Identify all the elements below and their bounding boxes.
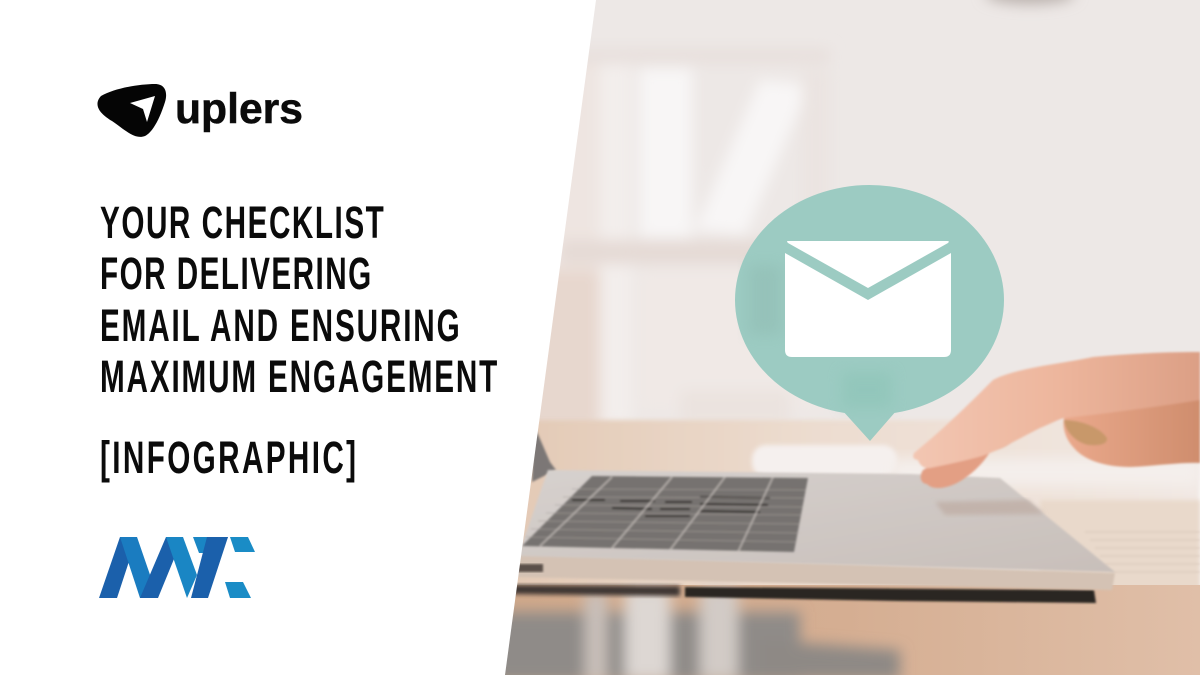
envelope body	[785, 253, 951, 357]
table foreground	[490, 585, 1200, 675]
subtitle: infographic tag: [INFOGRAPHIC]	[100, 433, 356, 484]
title: EMAIL AND ENSURING	[100, 301, 460, 352]
laptop front edge	[515, 554, 1115, 590]
icon: paper plane blob	[97, 84, 166, 137]
title: FOR DELIVERING	[100, 249, 371, 300]
desk surface	[517, 418, 1200, 585]
logo: uplers	[97, 84, 303, 137]
thumbnail	[1064, 420, 1107, 445]
background photo: laptop on desk	[490, 0, 1200, 675]
blurred wall and bookshelf	[490, 0, 1200, 430]
speech bubble with envelope	[735, 185, 1004, 441]
laptop	[512, 425, 1115, 603]
hand	[913, 352, 1200, 488]
laptop deck	[518, 470, 1115, 572]
trackpad edge	[935, 500, 1044, 515]
wordmark: uplers	[175, 85, 303, 133]
title: MAXIMUM ENGAGEMENT	[100, 352, 497, 403]
envelope flap	[787, 241, 949, 288]
title	[100, 198, 497, 403]
bubble translucency shading	[759, 276, 771, 324]
logo: MT	[99, 537, 255, 598]
index finger and back of hand	[913, 352, 1200, 468]
white left panel	[0, 0, 596, 675]
keyboard	[522, 476, 808, 552]
bubble	[735, 185, 1004, 441]
title: YOUR CHECKLIST	[100, 198, 384, 249]
laptop screen edge	[532, 425, 556, 482]
laptop shadow	[512, 585, 1096, 603]
lower fingers	[920, 444, 1008, 490]
thumb	[1063, 400, 1200, 467]
